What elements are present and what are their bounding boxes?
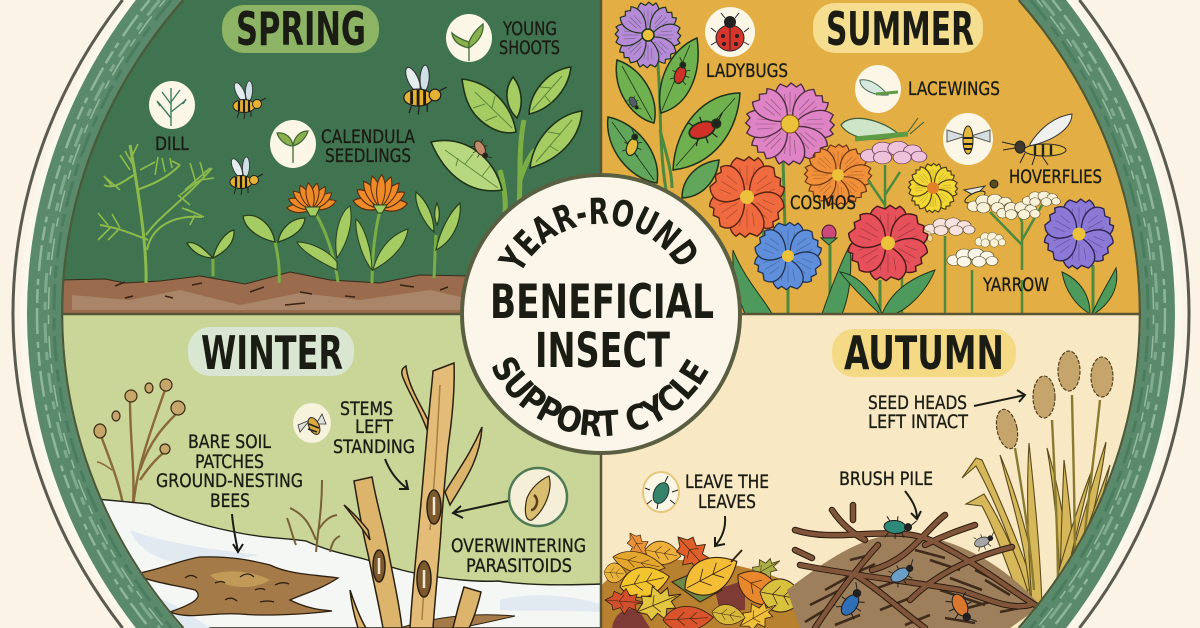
label: overwintering parasitoids: PARASITOIDS (466, 555, 572, 577)
label: leave the leaves (685, 471, 769, 513)
icon: ladybug (705, 7, 755, 57)
heading: spring: SPRING (236, 2, 366, 56)
label: calendula seedlings (322, 129, 415, 162)
label: ladybugs: LADYBUGS (706, 60, 788, 82)
label: brush pile: BRUSH PILE (839, 468, 933, 490)
plant: small twig (287, 480, 340, 552)
insect: hoverfly large (1002, 114, 1072, 165)
soil patch lower (400, 615, 515, 628)
icon: bee 3 (229, 157, 263, 195)
heading: summer: SUMMER (826, 2, 974, 56)
panel: summer (601, 0, 1150, 314)
icon: green beetle (643, 472, 679, 512)
arrow: to leaf pile (715, 516, 725, 546)
title: support cycle: SUPPORT CYCLE (492, 357, 709, 437)
label: stems left standing: STANDING (333, 436, 415, 458)
center badge (460, 173, 742, 455)
grasses with seed heads (962, 351, 1113, 605)
title: year-round: YEAR-ROUND (497, 198, 696, 268)
plant: seedlings (187, 215, 305, 283)
title: insect: INSECT (535, 323, 670, 379)
heading: spring (222, 5, 379, 53)
label: calendula seedlings: SEEDLINGS (325, 145, 411, 167)
soil bed (60, 272, 470, 314)
label: young shoots: SHOOTS (499, 37, 560, 59)
label: overwintering parasitoids (451, 535, 586, 577)
label: bare soil patches ground-nesting bees (156, 431, 303, 512)
label: stems left standing: STEMS (340, 398, 393, 420)
flower: blue (733, 222, 851, 314)
arrow: to hollow stem (453, 501, 508, 518)
plant: seedling right (416, 192, 460, 278)
insect: small hoverfly (963, 180, 998, 205)
stems left standing (344, 363, 482, 628)
icon: bee (293, 403, 331, 443)
flower: purple right (1041, 199, 1117, 314)
flower: white yarrow group (902, 191, 1060, 314)
flower: bud (821, 225, 837, 245)
label: lacewings: LACEWINGS (908, 78, 1000, 100)
plant: calendula 2 (352, 173, 410, 283)
label: yarrow: YARROW (982, 274, 1049, 296)
label: dill: DILL (155, 133, 189, 155)
panel: autumn (601, 314, 1150, 628)
label: seed heads left intact: LEFT INTACT (868, 411, 969, 433)
soil patch (134, 557, 338, 616)
arrow: to seed heads (974, 390, 1025, 406)
label: stems left standing: LEFT (355, 416, 394, 438)
label: hoverflies: HOVERFLIES (1009, 166, 1102, 188)
icon: young shoots (446, 14, 492, 62)
flower: red (840, 205, 935, 314)
label: bare soil patches ground-nesting bees: BEES (210, 490, 250, 512)
plant: dill (98, 144, 214, 283)
label: seed heads left intact (868, 392, 969, 433)
icon: hoverfly (943, 113, 993, 165)
flower: pink yarrow (860, 141, 928, 208)
label: bare soil patches ground-nesting bees: BARE SOIL (188, 431, 271, 453)
flower: pink cosmos (746, 83, 834, 228)
arrow: to soil (232, 514, 243, 552)
label: calendula seedlings: CALENDULA (321, 126, 415, 148)
icon: overwintering cocoon (509, 468, 567, 526)
insect: lacewing (841, 118, 924, 139)
label: bare soil patches ground-nesting bees: GROUND-NESTING (156, 470, 303, 492)
arrow: to stems (385, 459, 408, 489)
snow ground (80, 499, 601, 628)
label: young shoots (500, 21, 560, 54)
label: leave the leaves: LEAVE THE (685, 471, 769, 493)
icon: bee 2 (403, 65, 447, 114)
plant: ladybug host plant (608, 2, 740, 198)
panel: winter (50, 314, 601, 628)
flower: red orange cosmos (708, 156, 786, 238)
leaf pile (601, 527, 812, 628)
label: stems left standing (333, 398, 415, 458)
label: leave the leaves: LEAVES (698, 491, 756, 513)
title: beneficial: BENEFICIAL (490, 275, 714, 330)
icon: calendula seedling (270, 120, 316, 168)
brush pile (787, 505, 1041, 628)
label: seed heads left intact: SEED HEADS (868, 392, 967, 414)
arrow: to brush pile (905, 491, 921, 519)
plant: dry seed stalks (94, 379, 185, 518)
label: overwintering parasitoids: OVERWINTERING (451, 535, 586, 557)
icon: lacewing (855, 65, 901, 113)
label: bare soil patches ground-nesting bees: PATCHES (195, 451, 264, 473)
plant: calendula 1 (283, 179, 351, 282)
heading: winter: WINTER (201, 326, 343, 380)
icon: dill (149, 81, 195, 129)
flower: orange cosmos (804, 144, 872, 206)
icon: bee 1 (232, 81, 266, 119)
label: cosmos: COSMOS (790, 192, 856, 214)
snow shadows (130, 530, 600, 628)
heading: autumn: AUTUMN (844, 326, 1004, 380)
label: young shoots: YOUNG (502, 18, 557, 40)
panel: spring (50, 0, 601, 314)
flower: yellow daisy (908, 163, 958, 213)
plant: young shoots large (431, 67, 582, 212)
